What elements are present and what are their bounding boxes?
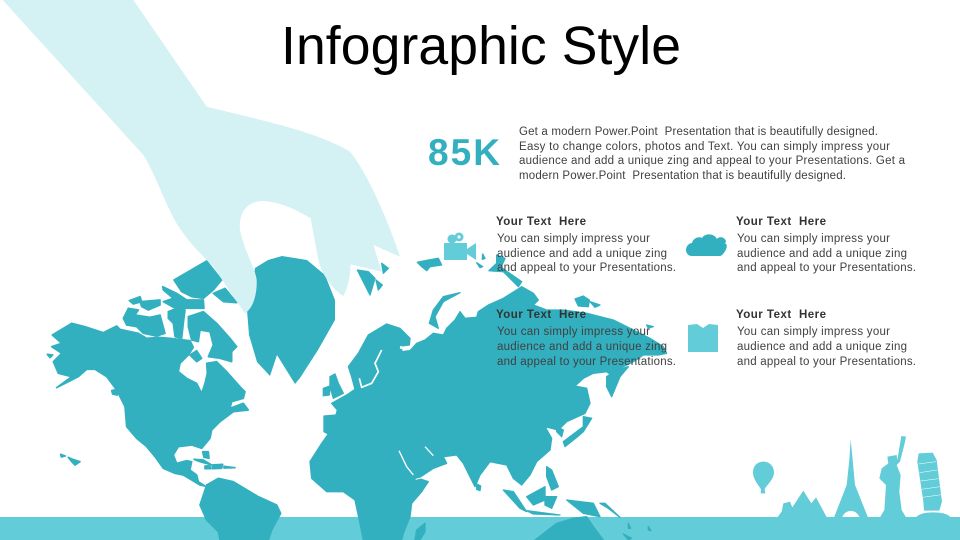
map: Greenland: [247, 256, 335, 384]
icon: book: [688, 324, 718, 352]
text block: bottom right: and appeal to your Presentations.: [737, 356, 916, 368]
text block: top right: You can simply impress your: [737, 233, 890, 245]
text block: bottom right: Your Text Here: [736, 309, 826, 321]
text block: bottom left: Your Text Here: [496, 309, 586, 321]
world map: [47, 254, 667, 540]
text block: bottom right: audience and add a unique zing: [737, 341, 907, 353]
text block: top right: Your Text Here: [736, 216, 826, 228]
text block: bottom right: [736, 309, 916, 368]
icon: movie camera: [444, 232, 476, 260]
intro paragraph: audience and add a unique zing and appeal to your Presentations. Get a: [519, 155, 906, 167]
map: Eurasia, Africa and Oceania: [310, 254, 667, 540]
icon: Eiffel tower: [834, 439, 868, 518]
text block: bottom left: audience and add a unique zing: [497, 341, 667, 353]
title: Infographic Style: [281, 17, 681, 76]
intro paragraph: Easy to change colors, photos and Text. You can simply impress your: [519, 141, 890, 153]
icon: cloud: [686, 234, 727, 256]
intro paragraph: Get a modern Power.Point Presentation that is beautifully designed.: [519, 126, 878, 138]
text block: bottom right: You can simply impress your: [737, 326, 890, 338]
text block: top left: and appeal to your Presentations.: [497, 262, 676, 274]
text block: top left: Your Text Here: [496, 216, 586, 228]
hand: [3, 0, 400, 313]
text block: bottom left: and appeal to your Presentations.: [497, 356, 676, 368]
landmarks skyline: [753, 436, 951, 524]
text block: bottom left: [496, 309, 676, 368]
text block: top left: [496, 216, 676, 274]
stat: 85K: 85K: [428, 132, 500, 173]
bottom band: [0, 517, 960, 540]
text block: top right: audience and add a unique zing: [737, 248, 907, 260]
map: Americas: [47, 261, 281, 540]
icon: Statue of Liberty: [879, 436, 907, 518]
text block: top right: and appeal to your Presentations.: [737, 262, 916, 274]
icon: leaning tower of Pisa: [916, 453, 951, 524]
intro paragraph: [519, 126, 906, 182]
text block: bottom left: You can simply impress your: [497, 326, 650, 338]
text block: top right: [736, 216, 916, 274]
icon: pyramids and sphinx: [777, 491, 827, 518]
text block: top left: You can simply impress your: [497, 233, 650, 245]
text block: top left: audience and add a unique zing: [497, 248, 667, 260]
intro paragraph: modern Power.Point Presentation that is beautifully designed.: [519, 170, 846, 182]
icon: hot-air balloon: [753, 462, 774, 493]
